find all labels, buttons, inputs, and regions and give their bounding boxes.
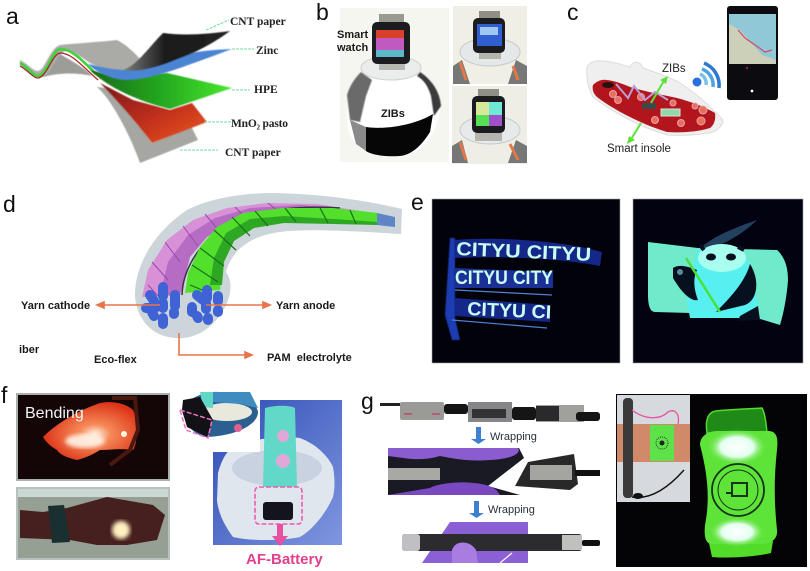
wave edge strips [20,49,96,76]
photo: watch bottom right [452,86,527,164]
layer labels: CNT paper [230,16,286,28]
photo: CITYU bands [432,199,620,363]
wrapping label 2: Wrapping [488,504,535,516]
arrow: wrapping 2 [469,501,484,518]
label a: a [6,3,19,29]
grey underside of the wave [43,54,92,77]
labels: Eco-flex [94,354,138,366]
photo: CITYU bands: CITYU CI [467,299,552,324]
wrapping label 1: Wrapping [490,431,537,443]
photo: watch on bottle: watch [336,42,368,54]
insole dots [610,90,707,126]
photo: hand with band [17,488,169,559]
ZIBs label: ZIBs [662,63,686,75]
labels [19,300,352,366]
photo: watch on bottle: ZIBs [381,108,405,120]
photo: panda [633,199,803,363]
photo: bending [17,394,169,480]
bottom CNT paper layer [97,87,198,163]
photo: black backing [616,394,807,567]
MnO2 layer [100,83,207,143]
layer labels: Zinc [256,45,278,57]
Eco-flex shell [135,193,402,338]
yarn tip [377,213,395,227]
anode fibres [192,290,218,320]
panel e: glowing displays [411,189,803,363]
labels: PAM electrolyte [267,352,352,364]
arrow: ZIBs [651,79,665,103]
layer labels [225,16,288,159]
strip: hand holding cable [388,448,600,495]
panel b: smart watch photos [316,0,527,164]
labels: iber [19,344,40,356]
label d: d [3,191,16,217]
panel g: wrapped cable battery [361,388,807,567]
photo: CITYU bands: CITYU CITYU [456,239,592,266]
shoe outline [587,61,723,135]
labels: Yarn anode [276,300,335,312]
arrow: wrapping 1 [471,427,486,444]
inset: band photo [176,390,260,452]
arrow: yarn anode [206,302,270,308]
panel c: smart insole [567,0,778,155]
arrow: PAM electrolyte [179,333,252,358]
phone with map [727,6,778,100]
top grey sheet [20,40,147,77]
labels: Yarn cathode [21,300,90,312]
photo: watch on bottle [336,8,449,162]
layer labels: CNT paper [225,147,281,159]
label g: g [361,388,374,414]
arrow: Smart insole [630,123,641,141]
label lines [180,20,254,150]
label f: f [1,382,8,408]
strip: wrapped cable [402,522,600,563]
Zinc layer [88,49,232,80]
dark gap between yarns [182,207,340,295]
layer labels: HPE [254,84,278,96]
bending label: Bending [25,405,84,422]
photo: band in ice [213,400,342,545]
arrow: yarn cathode [97,302,160,308]
insole [593,80,715,132]
panel f: aqueous battery wearables [1,382,342,568]
photo: glowing band [700,408,777,558]
icon: wifi signal [692,63,719,88]
strip: unwrapped cable [380,402,600,422]
panel a: layered battery diagram [6,3,288,163]
HPE layer [90,70,232,109]
CNT paper top layer [122,31,230,71]
ZIB chips [642,103,656,109]
arrow: AF-Battery [272,524,288,546]
photo: wrist with band [617,395,690,502]
label e: e [411,189,424,215]
photo: watch top right [453,6,527,84]
panel d: yarn battery fiber [3,191,402,366]
photo: CITYU bands: CITYU CITY [455,268,553,289]
text labels in photo: Smart [337,29,369,41]
AF-Battery label: AF-Battery [246,551,323,568]
green yarn [185,208,378,293]
pink yarn [142,203,373,298]
cathode fibres [146,287,175,324]
Smart insole label: Smart insole [607,143,671,155]
layer labels: MnO₂ pasto [231,118,288,130]
